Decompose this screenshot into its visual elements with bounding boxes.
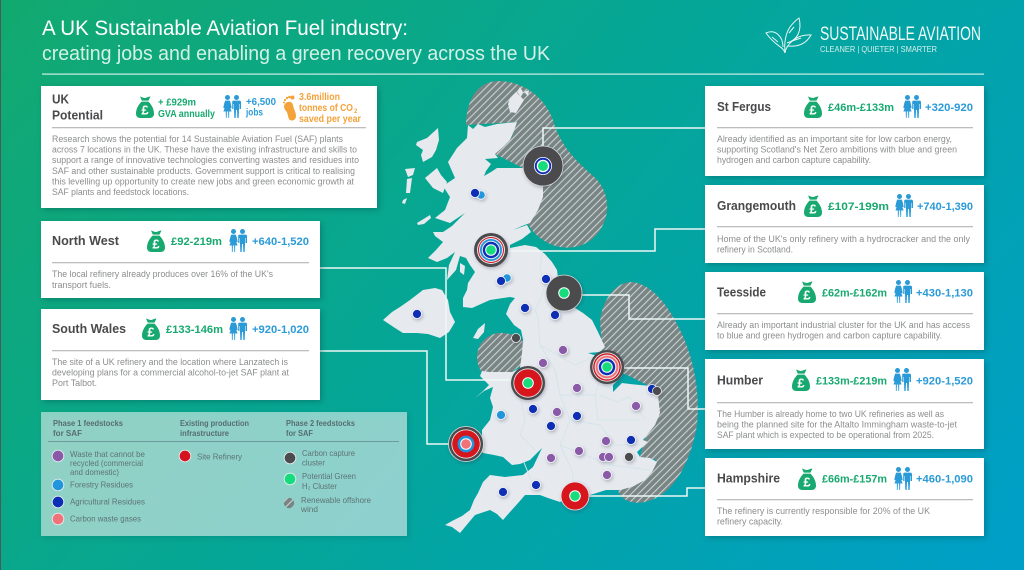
panel: Hampshire [705, 458, 984, 536]
body text: this levelling up opportunity to create new jobs and green economic growth at [52, 176, 354, 186]
legend column: Existing production [179, 419, 249, 462]
heading: Humber [717, 372, 763, 388]
title: A UK Sustainable Aviation Fuel industry: [42, 17, 408, 40]
icon: people [894, 280, 912, 303]
value: £62m-£162m [822, 288, 887, 300]
legend column: Phase 2: Phase 2 feedstocks [286, 419, 356, 428]
land: Scottish islands [402, 87, 529, 339]
icon: money bag [798, 468, 816, 490]
body text: SAF plants and feedstock locations. [52, 187, 189, 197]
icon: money bag [792, 370, 810, 391]
legend column: Phase 2: Potential Green [302, 471, 356, 481]
body text [717, 234, 970, 254]
legend column: Phase 1: Phase 1 feedstocks [53, 419, 124, 428]
title [42, 17, 551, 65]
body text [717, 506, 930, 526]
heading: Teesside [717, 284, 766, 300]
body text: support a range of innovative technologies converting wastes and residues into [52, 155, 359, 165]
heading: Grangemouth [717, 198, 796, 213]
body text: SAF plant which is expected to be operational from 2025. [717, 430, 934, 440]
stat: jobs [245, 96, 276, 118]
icon: money bag [136, 96, 154, 118]
logo: Sustainable Aviation: CLEANER | QUIETER | SMARTER [820, 44, 937, 54]
legend column: Phase 1 [52, 419, 145, 525]
legend column: Existing production: Site Refinery [197, 452, 243, 462]
stat: GVA [158, 96, 215, 120]
offshore wind zone: north Scotland [466, 81, 607, 248]
heading: Hampshire [717, 470, 780, 486]
stat: jobs: jobs [245, 106, 263, 118]
stat: GVA: + £929m [158, 96, 196, 108]
marker: Hampshire [561, 482, 589, 510]
icon: money bag: £ [809, 102, 817, 118]
icon: money bag: £ [797, 376, 805, 390]
jobs: +740-1,390 [917, 201, 973, 213]
heading: UK Potential: Potential [52, 108, 103, 122]
body text: to blue and green hydrogen and carbon capture capability. [717, 330, 942, 340]
body text: The refinery is currently responsible for 20% of the UK [717, 506, 930, 516]
icon: people [895, 194, 913, 217]
legend column: Existing production: Existing production [180, 419, 249, 428]
small feedstock dots [412, 188, 662, 496]
legend column: Phase 2: Renewable offshore [301, 495, 371, 505]
land: Northern Ireland [383, 288, 455, 338]
heading: UK Potential [52, 92, 103, 122]
body text [52, 357, 289, 388]
body text: The site of a UK refinery and the location where Lanzatech is [52, 357, 288, 367]
panel: legend [41, 412, 407, 536]
body text: SAF and other sustainable products. Government support is critical to realising [52, 166, 355, 176]
panel: South Wales [41, 309, 320, 400]
legend column: Phase 1: Carbon waste gases [70, 514, 141, 524]
jobs: +640-1,520 [252, 236, 309, 248]
offshore wind zone: Irish Sea [477, 333, 526, 380]
marker: Teesside [546, 275, 582, 311]
body text [717, 320, 970, 340]
value: £92-219m [171, 236, 222, 248]
body text: being the planned site for the Altalto Immingham waste-to-jet [717, 420, 957, 430]
stat: jobs: +6,500 [246, 96, 276, 108]
icon: people [223, 95, 241, 118]
panel: St Fergus [705, 86, 984, 176]
body text: supporting Scotland's Net Zero ambitions with blue and green [717, 144, 957, 154]
jobs: +920-1,020 [252, 324, 309, 336]
jobs: +460-1,090 [916, 474, 973, 486]
icon: people [229, 317, 247, 340]
panel: UK Potential [41, 86, 377, 208]
regional borders [520, 252, 650, 495]
body text: Port Talbot. [52, 378, 97, 388]
icon: money bag [804, 196, 822, 217]
icon: money bag [142, 318, 160, 340]
marker: St Fergus [523, 146, 563, 186]
legend column: Phase 1: for SAF [53, 429, 82, 438]
legend column: Phase 2: H₂ Cluster [302, 481, 337, 491]
jobs: +430-1,130 [916, 288, 973, 300]
body text: across 7 locations in the UK. These have the existing infrastructure and skills to [52, 144, 357, 154]
panel: Teesside [705, 272, 984, 350]
icon: money bag: £ [147, 324, 155, 340]
legend column: Phase 2 [284, 419, 371, 514]
body text: Home of the UK's only refinery with a hydrocracker and the only [717, 234, 970, 244]
stat: CO2 [299, 91, 361, 125]
body text [52, 269, 273, 290]
icon: money bag: £ [803, 474, 811, 490]
panel: Humber [705, 359, 984, 449]
legend column: Phase 1: Waste that cannot be [70, 449, 145, 459]
body text: developing plans for a commercial alcohol-to-jet SAF plant at [52, 368, 289, 378]
icon: money bag [147, 230, 165, 252]
body text: The Humber is already home to two UK refineries as well as [717, 409, 944, 419]
body text [717, 134, 957, 165]
land: Great Britain [428, 122, 660, 533]
icon: money bag: £ [152, 236, 160, 252]
panel: North West [41, 221, 320, 298]
stat: GVA: GVA annually [158, 108, 215, 120]
heading: St Fergus [717, 99, 771, 114]
value: £66m-£157m [822, 474, 887, 486]
legend column: Phase 2: for SAF [286, 429, 313, 438]
legend column: Phase 1: Agricultural Residues [70, 496, 145, 506]
connector lines [320, 128, 705, 496]
body text: refinery in Scotland. [717, 244, 793, 254]
body text: Research shows the potential for 14 Sustainable Aviation Fuel (SAF) plants [52, 134, 343, 144]
body text: hydrogen and carbon capture capability. [717, 155, 871, 165]
icon: money bag [804, 96, 822, 118]
legend column: Phase 1: Forestry Residues [70, 480, 133, 490]
icon: money bag: £ [803, 288, 811, 302]
marker: Grangemouth [474, 233, 508, 267]
marker: South Wales [448, 426, 484, 462]
legend column: Existing production: infrastructure [180, 429, 230, 438]
heading: North West [52, 233, 120, 248]
map of the UK [320, 81, 705, 533]
legend column: Phase 2: wind [300, 504, 318, 514]
jobs: +920-1,520 [916, 376, 973, 388]
heading: UK Potential: UK [52, 92, 70, 106]
value: £133-146m [166, 324, 223, 336]
stat: CO2: saved per year [299, 113, 361, 125]
value: £46m-£133m [828, 102, 894, 114]
icon: people [894, 467, 912, 490]
legend column: Phase 2: Carbon capture [302, 448, 355, 458]
value: £133m-£219m [816, 376, 887, 388]
title: creating jobs and enabling a green recovery across the UK [42, 43, 551, 65]
marker: Humber [590, 350, 624, 384]
body text: transport fuels. [52, 280, 111, 290]
body text [52, 134, 359, 197]
icon: money bag [798, 282, 816, 303]
icon: footprint [283, 96, 296, 121]
jobs: +320-920 [925, 102, 973, 114]
body text [717, 409, 957, 440]
icon: money bag: £ [141, 102, 149, 118]
icon: people [893, 368, 911, 391]
icon: money bag: £ [809, 202, 817, 216]
marker: North West [511, 366, 545, 400]
stat: CO2: 2 [354, 109, 358, 115]
stat: CO2: 3.6million [299, 91, 340, 103]
legend column: Phase 1: recycled (commercial [70, 458, 143, 468]
panel: Grangemouth [705, 185, 984, 263]
body text: Already identified as an important site for low carbon energy, [717, 134, 952, 144]
body text: refinery capacity. [717, 516, 783, 526]
logo: Sustainable Aviation [766, 18, 981, 54]
legend column: Phase 2: cluster [302, 458, 325, 468]
value: £107-199m [828, 201, 889, 213]
icon: people [229, 229, 247, 252]
body text: Already an important industrial cluster for the UK and has access [717, 320, 970, 330]
offshore wind zone: east England [600, 282, 698, 503]
body text: The local refinery already produces over 16% of the UK's [52, 269, 273, 279]
stat: CO2: tonnes of CO [299, 102, 353, 114]
icon: people [903, 95, 921, 118]
icon: three leaves [766, 18, 811, 53]
heading: South Wales [52, 321, 126, 336]
legend column: Phase 1: and domestic) [70, 467, 119, 477]
